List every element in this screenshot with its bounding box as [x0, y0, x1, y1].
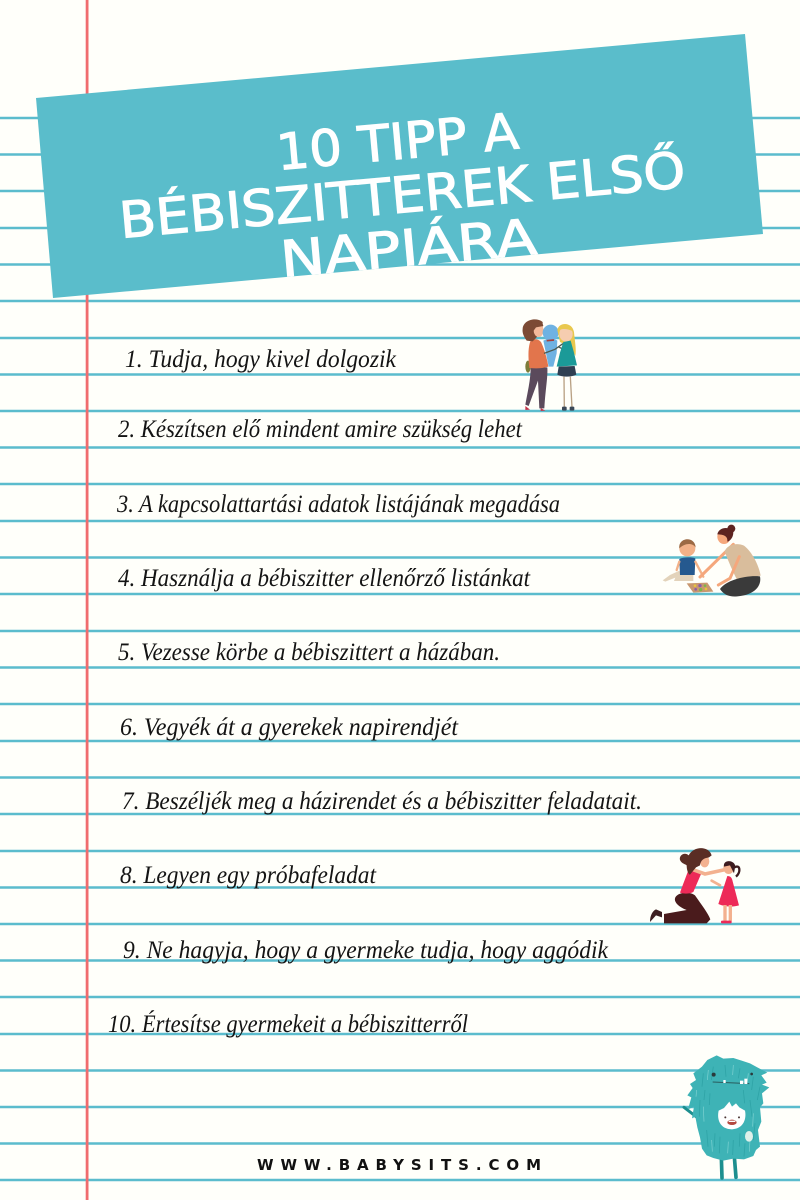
tips list: [108, 346, 642, 1038]
tip 7: 7. Beszéljék meg a házirendet és a bébiszitter feladatait.: [122, 788, 642, 815]
title banner: [36, 34, 763, 298]
website footer: WWW.BABYSITS.COM: [257, 1156, 541, 1174]
tip 4: 4. Használja a bébiszitter ellenőrző listánkat: [118, 565, 531, 592]
tip 9: 9. Ne hagyja, hogy a gyermeke tudja, hogy aggódik: [123, 937, 609, 964]
red margin line: [86, 0, 88, 1200]
tip 10: 10. Értesítse gyermekeit a bébiszitterről: [108, 1010, 468, 1038]
tip 1: 1. Tudja, hogy kivel dolgozik: [125, 346, 397, 373]
tip 8: 8. Legyen egy próbafeladat: [120, 862, 377, 889]
icon: mother playing a board game with a child: [663, 525, 761, 596]
tip 6: 6. Vegyék át a gyerekek napirendjét: [120, 714, 459, 741]
icon: mother, baby and babysitter: [523, 319, 577, 411]
icon: mother kneeling with daughter: [650, 848, 739, 923]
title: BÉBISZITTEREK ELSŐ: [117, 140, 688, 250]
title: [122, 112, 683, 277]
title: 10 TIPP A: [274, 102, 521, 182]
tip 5: 5. Vezesse körbe a bébiszittert a házában.: [118, 639, 500, 666]
title: NAPJÁRA: [278, 207, 539, 289]
tip 3: 3. A kapcsolattartási adatok listájának megadása: [116, 491, 560, 518]
icon: teal furry monster mascot: [684, 1055, 769, 1178]
tip 2: 2. Készítsen elő mindent amire szükség lehet: [118, 416, 523, 443]
